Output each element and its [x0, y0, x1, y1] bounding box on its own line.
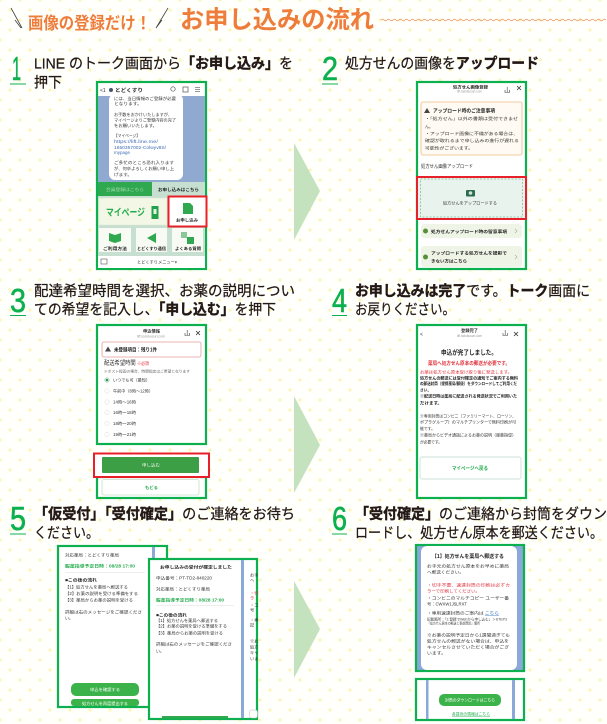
chat bubble: が、何卒よろしくお願い申し上 — [114, 165, 174, 172]
radio options: いつでも可（最短） — [113, 376, 150, 384]
next steps: 【3】薬局からお薬の説明を受ける — [65, 596, 133, 604]
panel: back button frame — [97, 477, 206, 498]
step 4 heading — [332, 282, 590, 319]
message body: お手元の処方せん原本をお早めに薬局 — [427, 562, 509, 570]
appointment time: 服薬指導予定日時：08/28 17:00 — [156, 596, 225, 604]
button: second action: 処方せんを再度提出する — [82, 700, 128, 707]
warning notice: ん。 — [425, 124, 433, 130]
menu bar: とどくすりメニュー▾ — [137, 258, 177, 266]
application number: 申込番号：PT-TD2-840220 — [156, 574, 213, 582]
message heading: 【1】処方せんを薬局へ郵送する — [432, 553, 504, 560]
step 6 heading — [332, 500, 607, 542]
step 3 text — [34, 283, 295, 318]
page header: lift.todokusuri.com — [457, 334, 482, 338]
instructions: ※配送日時は薬局に配送される発送状況でご利用いた — [420, 392, 517, 400]
chat bubble: 1650357002-Colwyv8S/ — [114, 145, 167, 150]
chat bubble: お手数をおかけいたしますが、 — [114, 111, 172, 118]
link: upload notes: 処方せんアップロード時の留意事項 — [431, 228, 508, 235]
step 5 text: 「仮受付」「受付確定」のご連絡をお待ち — [34, 505, 295, 523]
button: back to my page: マイページへ戻る — [452, 466, 488, 472]
page header: 申込情報 — [143, 328, 161, 334]
panel: step 5 confirmed screen — [149, 559, 258, 719]
red notice: 薬局へ処方せん原本の郵送が必要です。 — [428, 360, 510, 367]
instructions: の郵送封筒（提携薬局/郵便）をダウンロードしてご利用くだ — [420, 380, 518, 387]
panel: step 1 LINE screen — [97, 82, 206, 269]
callout: upload area — [417, 177, 526, 219]
page header — [420, 327, 518, 338]
instructions: ※専用封筒はコンビニ（ファミリーマート、ローソン、 — [420, 412, 516, 420]
instructions — [420, 368, 519, 446]
button: second action — [71, 699, 139, 707]
title banner — [11, 6, 606, 34]
panel: step 3 delivery time form — [94, 325, 209, 498]
instructions: ポプラグループ）のマルチプリンターで無料印刷が可 — [420, 418, 516, 426]
clipped neighbouring message text: 記 — [250, 622, 255, 628]
warning notice — [421, 102, 522, 155]
warning notice: 確認が取れるまで申し込みの進行が遅れる — [425, 137, 519, 144]
message body: ・コンビニのマルチコピー ユーザー番 — [427, 594, 510, 602]
button: usage guide: ご利用方法 — [103, 245, 128, 252]
alert: unregistered items — [102, 342, 201, 357]
radio options — [105, 376, 153, 437]
arrow: step 3 to 4 — [294, 396, 320, 493]
confirmation title: お申し込みの受付が確定しました — [160, 564, 232, 570]
next steps: い。 — [65, 616, 73, 620]
next steps: 【3】薬局からお薬の説明を受ける — [156, 630, 223, 636]
completion message: 申込が完了しました。 — [441, 348, 497, 356]
chat bubble: https://lift.line.me/ — [114, 139, 159, 144]
step 6 text: 「受付確定」のご連絡から封筒をダウン — [355, 505, 607, 523]
menu background — [98, 182, 205, 256]
chat header: とどくすり — [115, 87, 143, 94]
message body: 号：CWXW1J5LRXT — [427, 602, 467, 608]
next steps: 【2】お薬の説明を受ける準備をする — [65, 590, 138, 597]
button: usage guide — [99, 228, 131, 252]
radio options: 16時〜18時 — [113, 410, 137, 415]
clipped neighbouring message text: 号 — [250, 608, 254, 614]
upload label: 処方せん画像アップロード — [421, 163, 473, 170]
page header: lift.todokusuri.com — [457, 90, 482, 94]
step number 6: 6 — [332, 500, 347, 537]
message body: 「処方せん原本の郵送と事前問診」箇所 — [427, 620, 481, 626]
step 5 heading — [10, 500, 295, 542]
step 3 text: 配達希望時間を選択、お薬の説明につい — [34, 283, 295, 300]
page header — [453, 84, 521, 94]
step 1 text: 押下 — [34, 74, 62, 92]
icon: right emphasis strokes — [156, 8, 168, 28]
chat bubble: 【マイページ】 — [114, 133, 140, 139]
step number 2: 2 — [322, 50, 338, 87]
button: envelope download: 封筒のダウンロードはこちら — [445, 696, 495, 704]
clipped neighbouring message text: キャ — [250, 650, 258, 655]
chat background — [98, 96, 205, 182]
message body: ・切手不要、速達封筒の印刷は必ずカ — [427, 582, 510, 588]
page header: 処方せん画像登録 — [453, 84, 489, 90]
button: partial — [162, 716, 228, 718]
arrow: step 5 to 6 — [294, 581, 320, 678]
panel: step 6 mailing instructions — [416, 545, 524, 671]
wavy rule — [381, 19, 606, 21]
button: check application — [71, 683, 139, 696]
blue side strip — [152, 547, 155, 559]
radio options: 午前中（8時〜12時） — [113, 388, 153, 394]
callout: submit button: 申し込む — [142, 462, 160, 468]
clipped neighbouring message text: ・切 — [250, 590, 258, 596]
radio options: 18時〜20時 — [113, 421, 137, 426]
step 2 heading — [322, 50, 539, 87]
step 1 text: LINE のトーク画面から「お申し込み」を — [34, 56, 293, 72]
message body: へ郵送ください。 — [427, 568, 464, 576]
next steps: 【2】お薬の説明を受ける準備をする — [156, 622, 227, 630]
radio options: 19時〜21時 — [113, 432, 137, 437]
next steps: ■この後の流れ — [65, 576, 98, 584]
panel: back button frame: もどる — [145, 484, 158, 490]
clipped neighbouring message text: ・コ — [250, 602, 258, 608]
field label: 配送希望時間 ※必須 — [104, 359, 149, 367]
panel: step 5 provisional screen — [58, 546, 167, 707]
instructions: さい。 — [420, 386, 431, 392]
clipped neighbouring message text: ・専 — [250, 616, 258, 622]
message body: ・専用速達封筒のご案内は こちら — [427, 610, 499, 616]
chat bubble: をお願いいたします。 — [114, 122, 157, 129]
chat header — [100, 87, 200, 94]
radio options: 14時〜16時 — [113, 400, 137, 404]
button: my page — [99, 198, 167, 225]
tab: application: お申し込みはこちら — [158, 186, 199, 193]
link: cannot photograph: きない方はこちら — [431, 258, 467, 264]
instructions: だけます。 — [420, 400, 442, 406]
next steps: 【1】処方せんを薬局へ郵送する — [65, 584, 128, 590]
chat bubble: には、当日情報のご登録が必要 — [114, 95, 176, 102]
step number 1 — [10, 50, 26, 87]
icon: left emphasis strokes — [11, 8, 22, 28]
appointment time: 服薬指導予定日時：08/28 17:00 — [65, 562, 136, 570]
panel: step 6 download button — [416, 679, 524, 720]
title: application flow: お申し込みの流れ — [180, 6, 374, 34]
blue side strip — [241, 560, 244, 718]
blue side strips — [426, 680, 515, 719]
chat bubble: げます。 — [114, 171, 132, 178]
arrow: step 1 to 2 — [294, 143, 320, 240]
next steps: 詳細は右のメッセージをご確認くださ — [156, 640, 232, 648]
next steps: 詳細は右のメッセージをご確認くださ — [65, 608, 142, 616]
chat bubble — [109, 94, 183, 180]
step 3 text: ての希望を記入し、「申し込む」を押下 — [34, 302, 276, 318]
message bubble — [421, 546, 517, 670]
message body: ラーで印刷してください。 — [427, 588, 480, 594]
step 1 text — [34, 56, 293, 92]
panel: step 2 upload screen — [417, 82, 526, 269]
panel: step 4 completion screen — [417, 325, 526, 498]
chat bubble: となります。 — [114, 100, 142, 107]
step 1 heading — [10, 50, 293, 92]
tab: member registration — [98, 182, 152, 196]
chat bubble: マイページよりご登録内容の完了 — [114, 116, 176, 124]
callout: upload area: 処方せんをアップロードする — [443, 200, 497, 206]
instructions: お薬は処方せん原本受け取り後に発送します。 — [420, 368, 512, 376]
message body: 記載箇所：「2.登録でWebから申し込む」＞STEP3 — [427, 616, 507, 622]
step 6 text — [355, 505, 607, 542]
button: my page: マイページ — [106, 207, 145, 219]
step 5 text: ください。 — [34, 525, 99, 542]
alert: unregistered items: 未登録項目：残り1件 — [114, 346, 157, 354]
warning notice: 可能性がございます。 — [425, 144, 473, 152]
link: upload notes — [421, 224, 522, 238]
callout: application button: お申し込み — [176, 216, 198, 224]
next steps: 【1】処方せんを薬局へ郵送する — [156, 617, 218, 624]
button: back to my page — [420, 457, 521, 479]
next steps — [156, 612, 232, 654]
step 4 text — [355, 282, 590, 318]
step number 4: 4 — [332, 282, 347, 319]
instructions: ※薬局からビデオ通話によるお薬の説明（服薬指導） — [420, 432, 516, 438]
next steps — [65, 576, 142, 620]
step number 5: 5 — [10, 500, 26, 537]
clipped neighbouring message text: お手 — [250, 572, 258, 578]
message body: キャンセルさせていただく場合がござ — [427, 644, 510, 650]
button: faq — [172, 228, 203, 252]
step 2 text: 処方せんの画像をアップロード — [345, 56, 539, 72]
chat bubble: ご多忙のところ恐れ入ります — [114, 159, 174, 166]
pharmacy name: 対応薬局：とどくすり薬局 — [65, 552, 119, 558]
button: faq: よくある質問 — [175, 245, 201, 252]
instructions: が必要です。 — [420, 438, 442, 446]
step number 1: 1 — [12, 50, 21, 87]
message body: 処方せんの郵送がない場合は、申込を — [427, 638, 509, 644]
instructions: 処方せんの郵送には受付確定の通知でご案内する無料 — [420, 374, 519, 382]
clipped neighbouring message text: いま — [250, 656, 258, 661]
page header: < — [420, 332, 423, 338]
clipped neighbouring message text: へ — [250, 578, 254, 582]
step 3 heading — [10, 282, 295, 319]
warning notice: ・「処方せん」以外の書類は受付できませ — [425, 115, 518, 122]
message body — [427, 562, 510, 656]
link: cannot photograph: アップロードする処方せんを撮影で — [431, 250, 507, 256]
page header: 登録完了 — [461, 327, 478, 334]
subtitle: image registration only: 画像の登録だけ！ — [28, 14, 151, 33]
callout: submit button — [94, 454, 209, 477]
button: newsletter — [136, 228, 167, 252]
page header: lift.todokusuri.com — [137, 334, 165, 338]
menu bar — [98, 256, 205, 268]
step 4 text: お戻りください。 — [355, 302, 455, 318]
clipped neighbouring message text: ※お — [250, 638, 258, 644]
clipped neighbouring message text: 処方 — [250, 644, 258, 650]
warning notice: ・アップロード画像に不備がある場合は、 — [425, 130, 518, 137]
warning notice: アップロード時のご注意事項 — [433, 108, 495, 114]
page header — [137, 328, 200, 338]
instructions: 能です。 — [420, 425, 435, 432]
next steps: ■この後の流れ — [156, 612, 188, 618]
note: ※ポスト投函の場合、時間指定はご希望となります — [104, 368, 191, 374]
step 5 text — [34, 505, 295, 542]
message body: います。 — [427, 650, 446, 656]
next steps: い。 — [156, 648, 164, 654]
chat bubble: mypage — [114, 150, 131, 155]
link: cannot photograph — [421, 246, 522, 267]
step number 3: 3 — [10, 282, 26, 319]
clipped neighbouring message text — [250, 572, 258, 661]
button: newsletter: とどくすり通信 — [137, 245, 167, 252]
button: check application: 申込を確認する — [90, 686, 120, 693]
clipped neighbouring message text: ラ — [250, 596, 254, 602]
link: information: 各提供の情報はこちら — [452, 710, 490, 718]
callout: application button — [168, 196, 206, 226]
pharmacy name: 対応薬局：とどくすり薬局 — [156, 586, 210, 592]
tab: member registration: 会員登録はこちら — [106, 186, 144, 193]
chat header: <1 — [100, 88, 106, 94]
message body: ※お薬の説明予定日から1週間過ぎても — [427, 632, 510, 638]
step 4 text: お申し込みは完了です。トーク画面に — [355, 282, 590, 300]
